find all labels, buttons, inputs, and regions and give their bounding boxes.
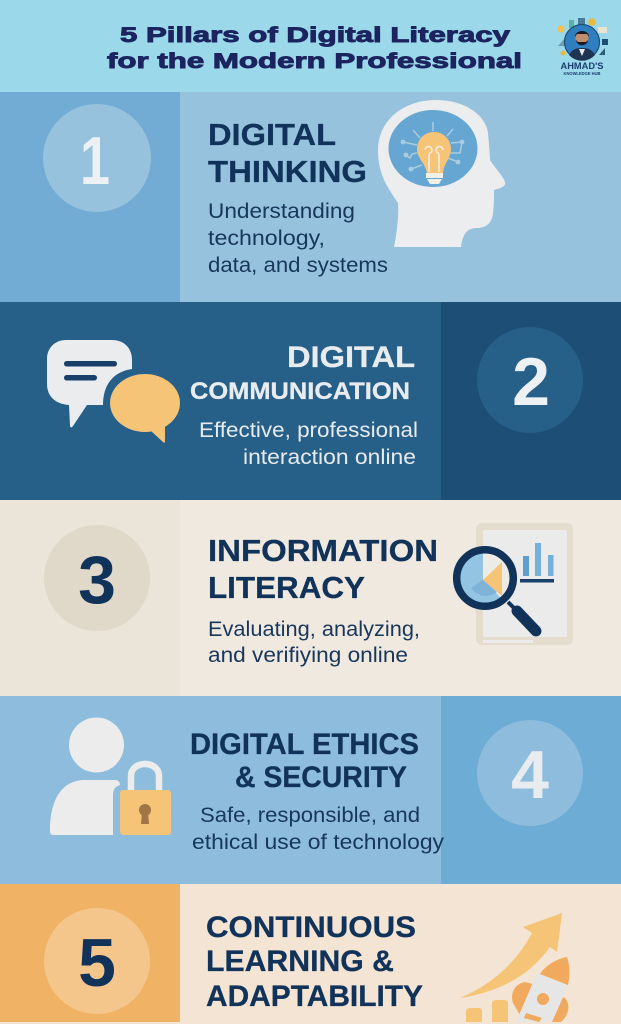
icon: head with light bulb <box>378 100 505 247</box>
icon: growth arrow and rocket <box>460 913 569 1022</box>
heading: continuous learning and adaptability: LEARNING & <box>206 945 394 978</box>
description: and verifiying online <box>208 644 408 667</box>
heading: continuous learning and adaptability: CONTINUOUS <box>206 911 416 944</box>
number badge 2: 2 <box>512 344 550 420</box>
heading: digital thinking <box>208 117 367 189</box>
title: for the Modern Professional <box>107 49 522 73</box>
heading: digital ethics and security: DIGITAL ETHICS <box>190 728 419 761</box>
icon: magnifier over report <box>457 523 573 645</box>
header banner <box>0 0 621 92</box>
panel 4: digital ethics and security <box>0 696 621 884</box>
number badge 2 <box>477 327 583 433</box>
heading: digital ethics and security: & SECURITY <box>235 761 407 794</box>
number badge 3: 3 <box>78 542 116 618</box>
heading: information literacy: LITERACY <box>208 570 365 605</box>
logo: Ahmad's Knowledge Hub: KNOWLEDGE HUB <box>564 71 601 76</box>
title <box>107 23 522 73</box>
description: Safe, responsible, and <box>200 804 420 827</box>
number badge 5: 5 <box>78 925 116 1001</box>
title: 5 Pillars of Digital Literacy <box>120 23 510 47</box>
heading: digital communication: COMMUNICATION <box>190 378 410 405</box>
logo: Ahmad's Knowledge Hub <box>558 18 608 76</box>
description <box>192 804 445 854</box>
description: Understanding <box>208 200 355 223</box>
icon: speech bubbles <box>47 340 180 443</box>
heading: information literacy <box>208 533 438 605</box>
description <box>208 618 420 667</box>
number badge 4: 4 <box>511 737 549 813</box>
description <box>199 419 418 469</box>
description: interaction online <box>243 446 416 469</box>
description: Evaluating, analyzing, <box>208 618 420 641</box>
number badge 1 <box>43 104 151 212</box>
number badge 5 <box>44 908 150 1014</box>
heading: digital communication: DIGITAL <box>287 341 415 374</box>
heading: digital communication <box>190 341 415 405</box>
description: technology, <box>208 227 325 250</box>
logo: Ahmad's Knowledge Hub: AHMAD'S <box>560 61 604 72</box>
description: ethical use of technology <box>192 831 445 854</box>
description <box>208 200 388 277</box>
heading: continuous learning and adaptability: ADAPTABILITY <box>206 980 423 1013</box>
panel 5: continuous learning <box>0 884 621 1022</box>
panel 3: information literacy <box>0 500 621 696</box>
heading: digital thinking: THINKING <box>208 154 367 189</box>
number badge 4 <box>477 720 583 826</box>
heading: information literacy: INFORMATION <box>208 533 438 568</box>
heading: digital ethics and security <box>190 728 419 794</box>
heading: continuous learning and adaptability <box>206 911 423 1013</box>
icon: person with padlock <box>50 718 171 835</box>
number badge 1: 1 <box>80 123 110 199</box>
panel 1: digital thinking <box>0 92 621 302</box>
description: Effective, professional <box>199 419 418 442</box>
number badge 3 <box>44 525 150 631</box>
description: data, and systems <box>208 254 388 277</box>
panel 2: digital communication <box>0 302 621 500</box>
heading: digital thinking: DIGITAL <box>208 117 336 152</box>
